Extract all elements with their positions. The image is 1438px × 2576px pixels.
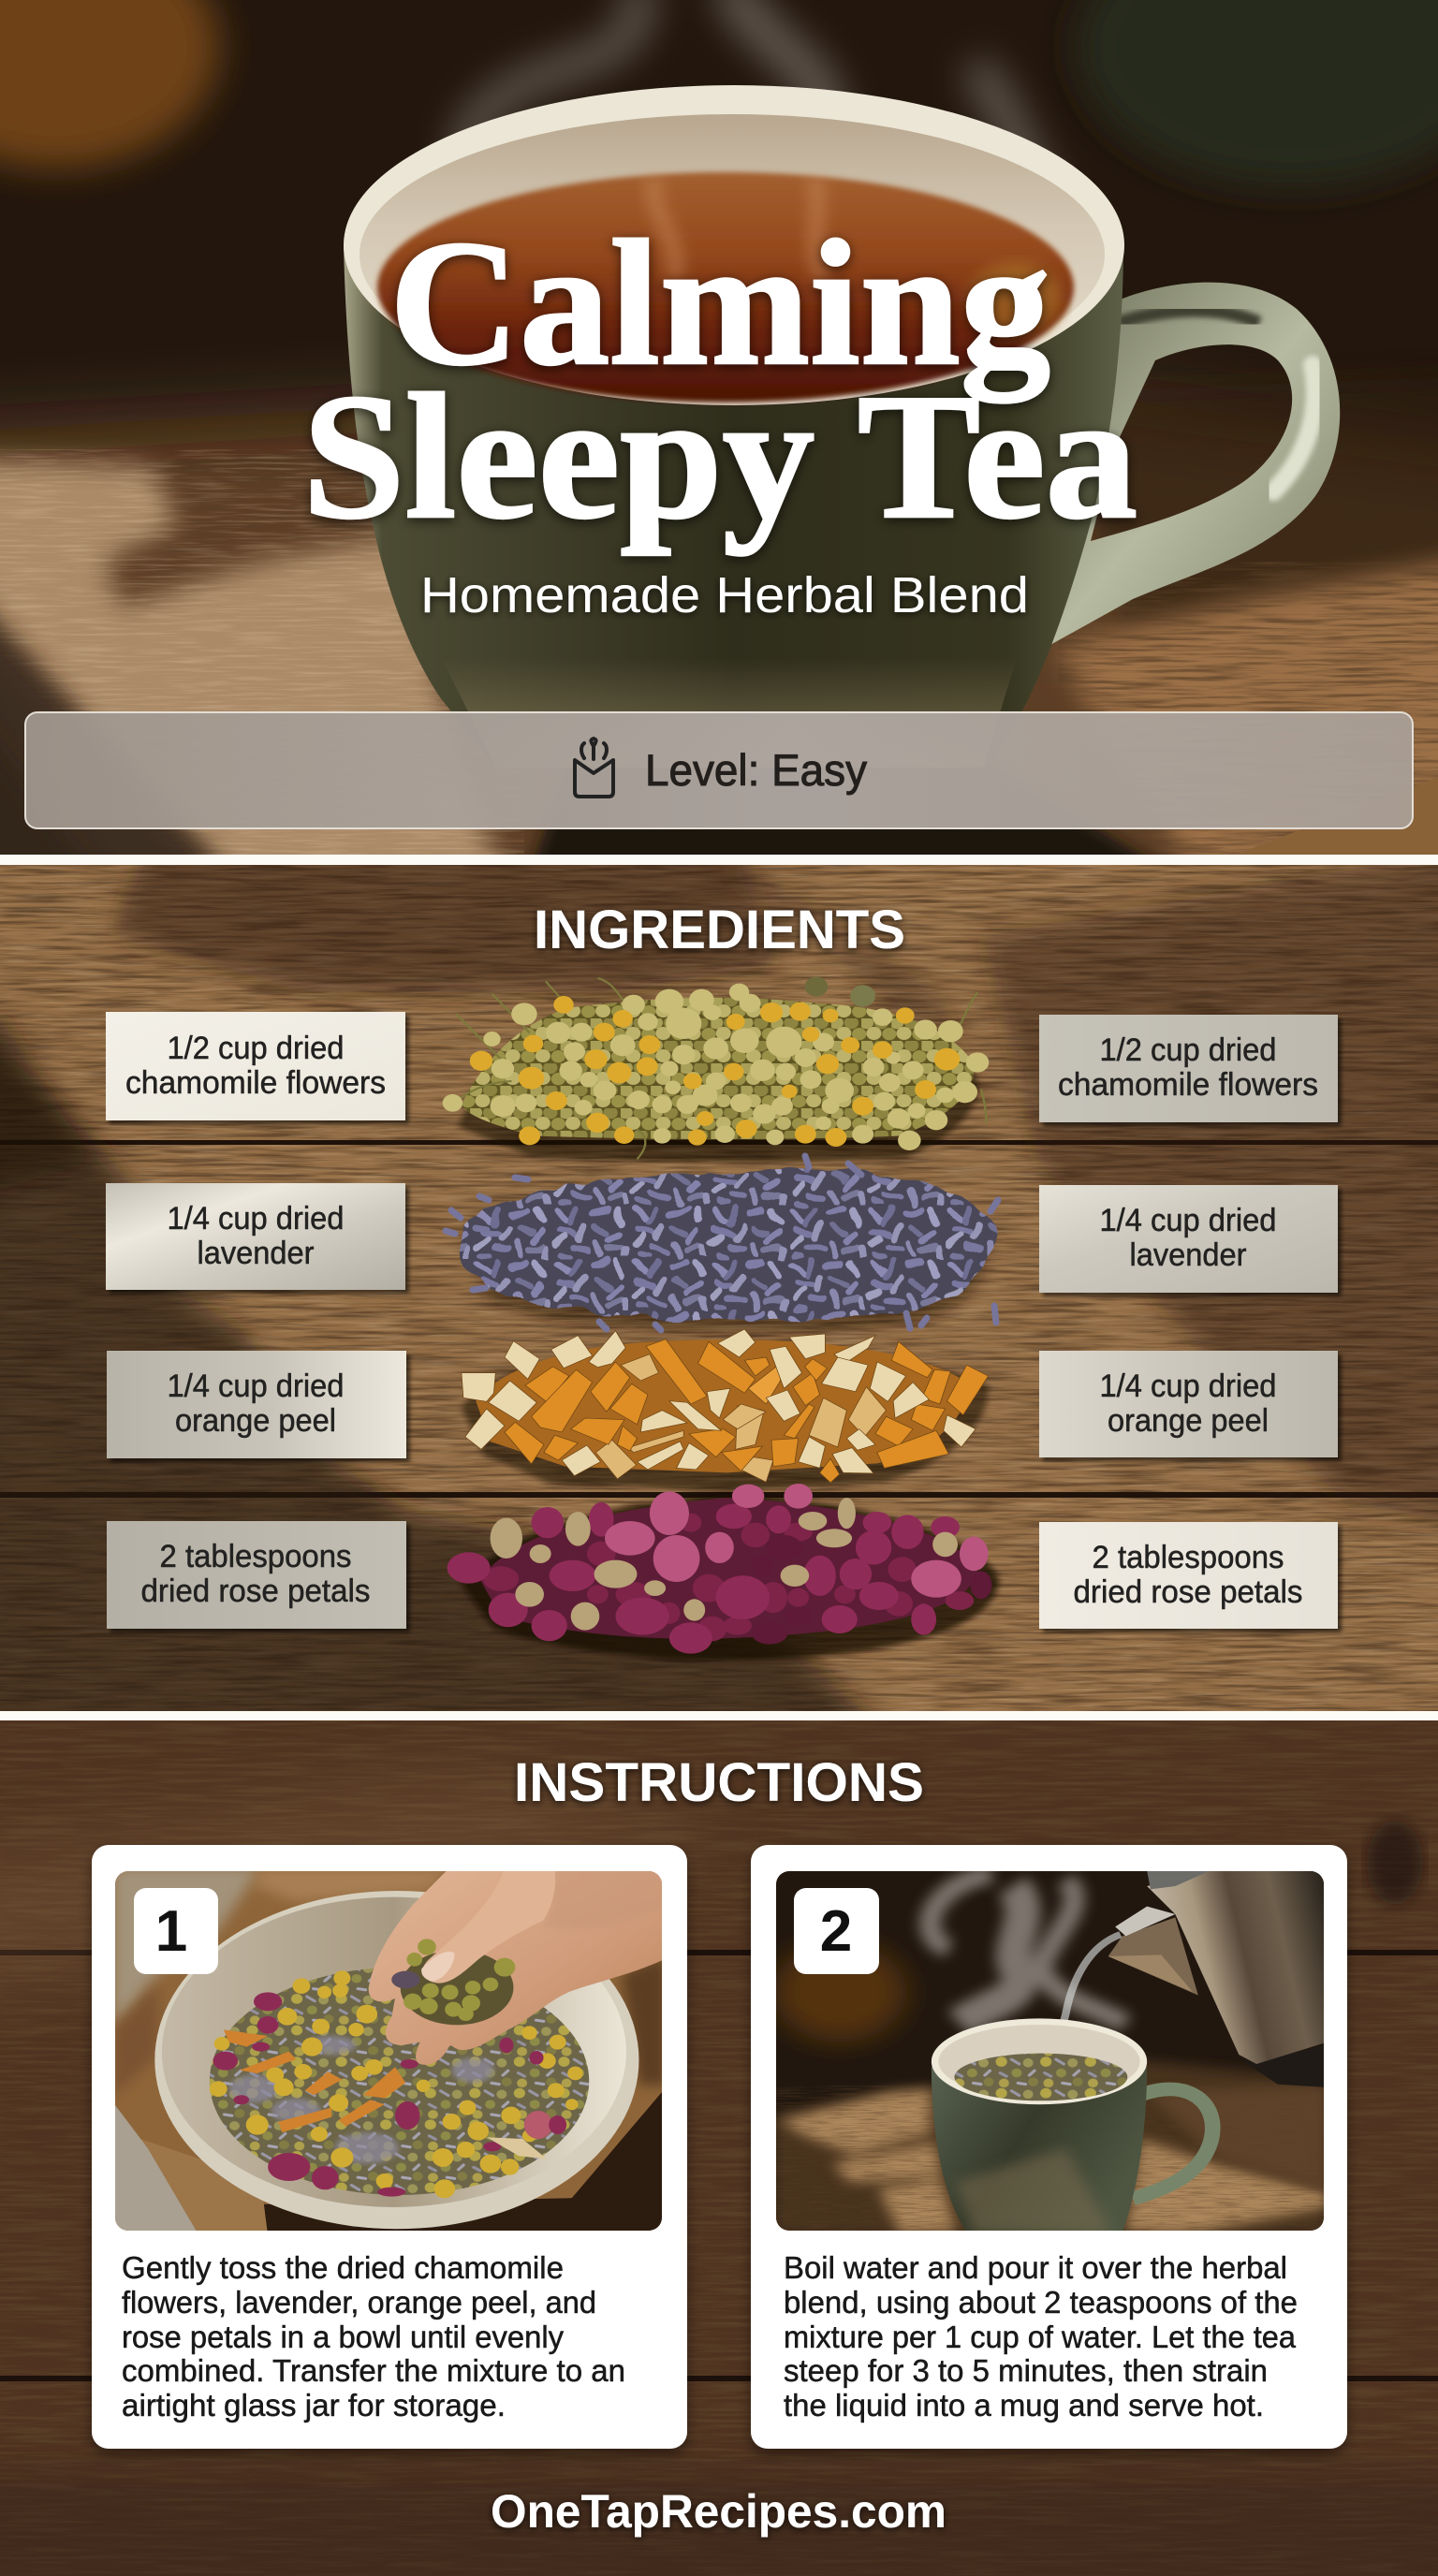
divider band — [0, 855, 1438, 865]
step 1 text: Gently toss the dried chamomile — [122, 2250, 564, 2285]
heading: instructions: INSTRUCTIONS — [514, 1752, 924, 1813]
ingredient label: orange peel right: orange peel — [1108, 1403, 1269, 1439]
ingredient label: chamomile right — [1039, 1015, 1338, 1122]
ingredient label: rose petals right: dried rose petals — [1073, 1574, 1303, 1610]
mug rim and tea surface — [344, 85, 1124, 405]
step 1 text: airtight glass jar for storage. — [122, 2388, 506, 2422]
ingredient label: orange peel right: 1/4 cup dried — [1099, 1368, 1277, 1404]
badge: number 2 — [794, 1888, 879, 1974]
pile: lavender — [446, 1156, 998, 1332]
step 2 text: the liquid into a mug and serve hot. — [784, 2388, 1264, 2422]
ingredient label: chamomile left — [106, 1012, 405, 1120]
ingredient label: lavender right — [1039, 1185, 1338, 1293]
icon: jar with sprout — [575, 739, 613, 797]
ingredient label: orange peel left — [107, 1351, 406, 1458]
pinch of herbs in hand — [391, 1939, 515, 2025]
step 2 text: mixture per 1 cup of water. Let the tea — [784, 2320, 1297, 2354]
mug body — [344, 247, 1123, 711]
ingredient label: orange peel left: orange peel — [175, 1403, 336, 1439]
ingredient label: rose petals left: dried rose petals — [140, 1573, 371, 1609]
ingredient label: rose petals left — [107, 1521, 406, 1629]
ingredient label: chamomile left: chamomile flowers — [125, 1065, 386, 1101]
step 2 text — [784, 2250, 1298, 2422]
ingredient label: lavender right: lavender — [1129, 1237, 1247, 1273]
kettle — [1108, 1870, 1328, 2087]
ingredient label: lavender right: 1/4 cup dried — [1099, 1203, 1277, 1238]
instructions section: dark wood background — [0, 1720, 1438, 2576]
mug handle — [1049, 283, 1340, 646]
step 1 photo: hand mixing herbs in a bowl — [112, 1867, 668, 2235]
heading: ingredients: INGREDIENTS — [534, 900, 905, 960]
hand — [369, 1867, 668, 2065]
level text: Level: Easy — [645, 745, 867, 795]
ingredient label: chamomile right: 1/2 cup dried — [1099, 1032, 1277, 1068]
ingredients section: wooden table background — [0, 865, 1438, 1711]
panel: step 1 — [92, 1845, 687, 2449]
footer: website: OneTapRecipes.com — [491, 2485, 946, 2538]
divider band — [0, 1711, 1438, 1720]
subtitle: Homemade Herbal Blend — [420, 567, 1029, 623]
step 1 text: combined. Transfer the mixture to an — [122, 2353, 625, 2388]
ingredient label: orange peel left: 1/4 cup dried — [167, 1368, 345, 1404]
ingredient label: lavender left — [106, 1183, 405, 1290]
ingredient label: chamomile left: 1/2 cup dried — [167, 1031, 345, 1066]
ingredient label: lavender left: lavender — [197, 1236, 315, 1271]
step 1 text — [122, 2250, 625, 2422]
mug — [932, 2018, 1212, 2232]
ingredient label: orange peel right — [1039, 1351, 1338, 1457]
pile: chamomile flowers — [443, 976, 989, 1163]
panel: step 2 — [751, 1845, 1347, 2449]
steam above the mug — [433, 0, 1068, 162]
badge: number 1: 1 — [155, 1899, 187, 1964]
water stream — [1053, 1935, 1121, 2080]
ingredient label: lavender left: 1/4 cup dried — [167, 1201, 345, 1237]
pile: dried orange peel — [462, 1329, 989, 1491]
step 2 text: blend, using about 2 teaspoons of the — [784, 2285, 1298, 2320]
ingredient label: chamomile right: chamomile flowers — [1058, 1067, 1318, 1103]
title — [302, 203, 1137, 556]
steam — [931, 1874, 1125, 2024]
ingredient label: rose petals left: 2 tablespoons — [159, 1539, 352, 1574]
step 1 text: rose petals in a bowl until evenly — [122, 2320, 564, 2354]
step 1 text: flowers, lavender, orange peel, and — [122, 2285, 596, 2320]
ingredient label: rose petals right: 2 tablespoons — [1092, 1540, 1284, 1575]
title: Calming — [389, 203, 1050, 403]
step 2 text: Boil water and pour it over the herbal — [784, 2250, 1287, 2285]
step 2 photo: water poured from kettle into mug — [772, 1867, 1328, 2235]
pile: dried rose petals — [448, 1484, 999, 1661]
hero section: photo of a steaming mug of tea on a wooden table — [0, 0, 1438, 936]
step 2 text: steep for 3 to 5 minutes, then strain — [784, 2353, 1268, 2388]
level bar — [25, 712, 1413, 828]
badge: number 2: 2 — [820, 1899, 852, 1964]
title: Sleepy Tea — [302, 357, 1137, 556]
ingredient label: rose petals right — [1039, 1522, 1338, 1629]
badge: number 1 — [134, 1888, 218, 1974]
thumb — [422, 1867, 555, 1983]
